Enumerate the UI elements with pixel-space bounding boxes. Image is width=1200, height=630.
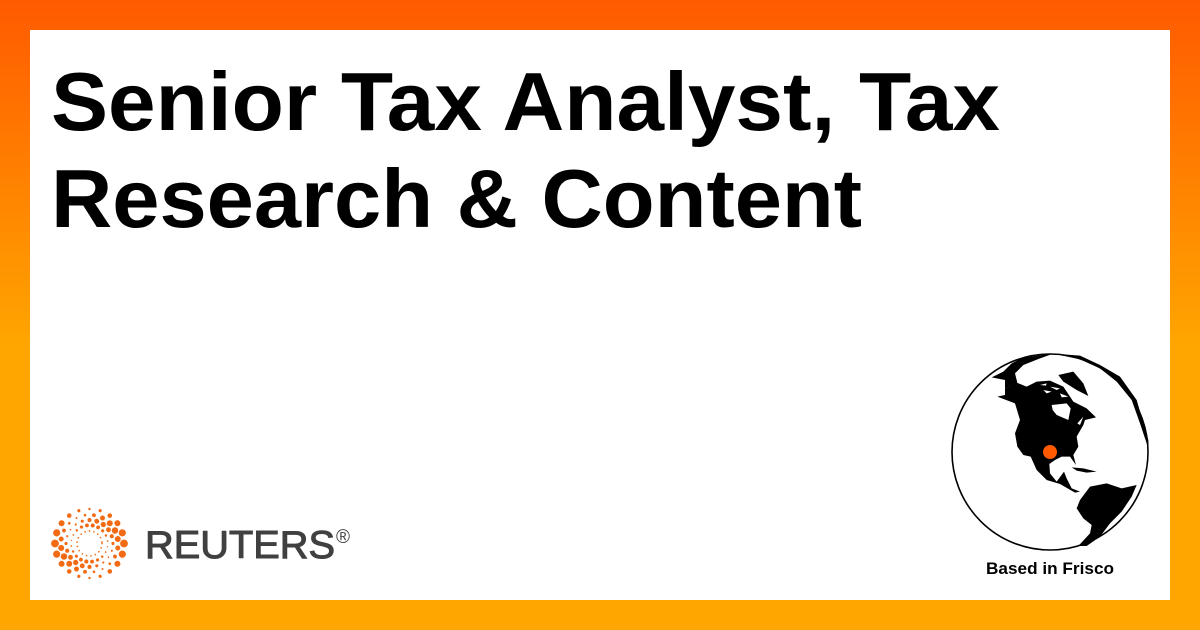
Alaska and Arctic coast	[992, 354, 1053, 388]
wordmark: REUTERS	[145, 524, 335, 567]
Baffin Island	[1058, 372, 1088, 396]
title: Senior Tax Analyst, Tax	[51, 55, 1000, 148]
location label: Based in Frisco	[986, 560, 1114, 578]
title	[51, 55, 1000, 245]
globe map	[952, 354, 1148, 550]
Hudson Bay and Arctic channels	[1040, 383, 1083, 425]
South America	[1077, 483, 1137, 546]
icon: dotted sphere	[48, 503, 131, 584]
continents	[992, 354, 1148, 546]
globe outline	[952, 354, 1148, 550]
Cuba and Caribbean	[1072, 467, 1097, 473]
title: Research & Content	[51, 152, 862, 245]
North America	[997, 381, 1096, 493]
location marker: Frisco	[1043, 445, 1057, 459]
logo: Reuters	[48, 503, 350, 584]
registered mark: ®	[336, 527, 350, 548]
northern rim land	[1053, 354, 1148, 448]
